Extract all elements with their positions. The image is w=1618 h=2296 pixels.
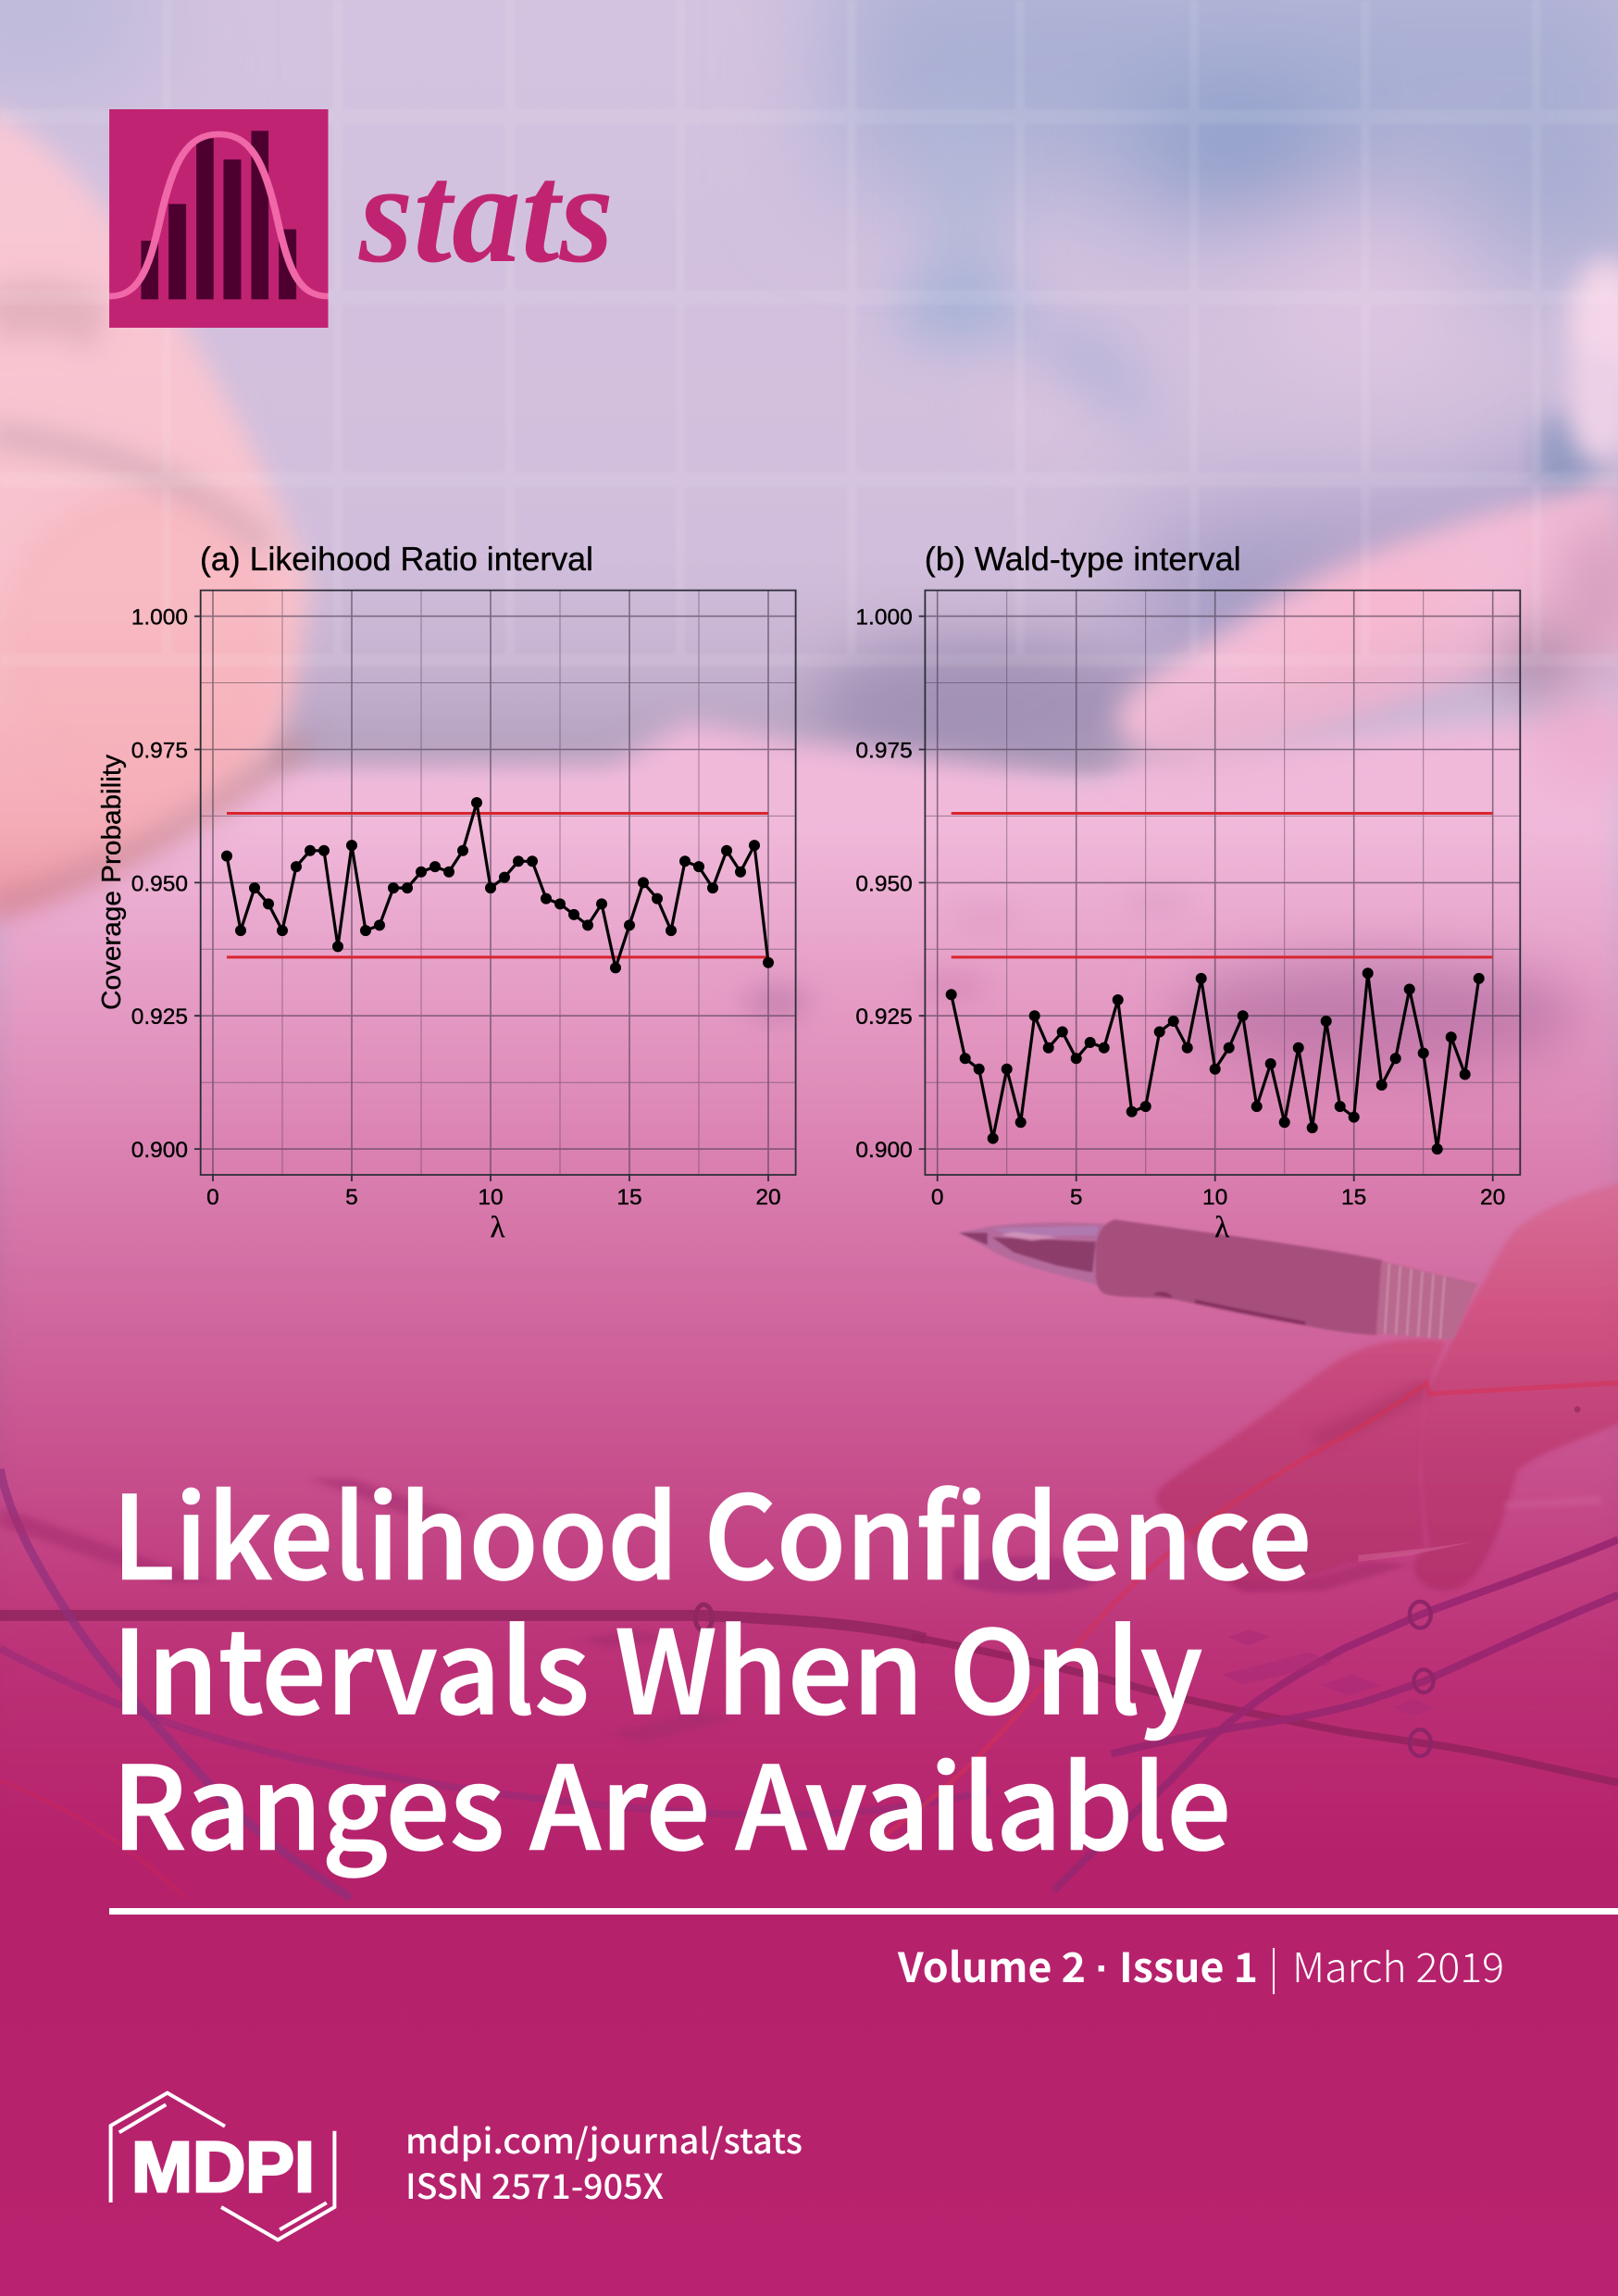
journal url and ISSN [405,2114,803,2209]
journal url and ISSN: mdpi.com/journal/stats [405,2114,803,2164]
right finger [1116,481,1618,757]
under-hand shadows [1226,1562,1412,1592]
journal logo [109,109,329,328]
chart a x axis title: λ [490,1211,505,1244]
issue line [897,1935,1504,1994]
chart a y axis title: Coverage Probability [97,754,127,1010]
hand, pen and lines, lower right [881,1179,1618,1890]
chart a y tick labels: 0.975 [131,739,188,763]
chart b x tick labels: 15 [1341,1185,1366,1210]
chart b x tick labels: 20 [1480,1185,1505,1210]
issue line: Issue 1 [1119,1935,1258,1994]
finger [1156,1340,1447,1586]
mauve table shadow [268,555,1194,778]
chart b title: (b) Wald-type interval [925,540,1241,578]
nib and barrel [959,1222,1107,1286]
chart b x tick labels: 10 [1202,1185,1227,1210]
MDPI logo [111,2093,334,2240]
chart b coverage line [952,973,1479,1149]
chart b y tick labels: 0.925 [855,1004,913,1029]
thumb and palm [1413,1179,1618,1591]
chart a x tick labels: 0 [206,1185,219,1210]
issue line: March 2019 [1292,1935,1504,1994]
histogram bars [141,131,296,299]
chart a x tick labels: 15 [616,1185,642,1210]
chart a y tick labels: 1.000 [131,605,188,630]
issue line: Volume 2 [897,1935,1086,1994]
chart b y tick labels: 0.950 [855,871,913,896]
chart b y tick labels: 0.975 [855,739,913,763]
red rule [881,1383,1618,1838]
chart a y tick labels: 0.925 [131,1004,188,1029]
chart a x tick labels: 5 [345,1185,358,1210]
chart b x tick labels [931,1185,1505,1210]
bell curve [109,134,329,296]
chart a data points [227,803,768,967]
chart a x tick labels [206,1185,781,1210]
chart b x axis title: λ [1214,1211,1229,1244]
chart a frame and ticks [194,591,796,1181]
chart a y tick labels [131,605,188,1163]
article title [112,1446,1312,1883]
chart b x tick labels: 0 [931,1185,944,1210]
dark slate patch right edge [1537,412,1601,505]
right edge finger [1569,259,1618,389]
diamonds on paper [1222,1629,1434,1716]
sheet highlight [1358,1541,1474,1562]
MDPI logo: MDPI [131,2128,315,2207]
chart a confidence bounds [227,813,768,957]
issue line: · [1096,1946,1109,1991]
chart b confidence bounds [952,813,1493,957]
chart b y tick labels [855,605,913,1163]
pen [959,1219,1477,1340]
title rule [109,1908,1618,1915]
window grid lines [0,0,1618,667]
chart b y tick labels: 0.900 [855,1138,913,1163]
article title: Ranges Are Available [112,1716,1231,1883]
chart b x tick labels: 5 [1070,1185,1083,1210]
grip [1096,1219,1383,1335]
paper [0,713,1618,2296]
knuckle shading [1314,1388,1426,1441]
chart b frame and ticks [919,591,1520,1181]
chart curves [913,1540,1618,1890]
chart a x tick labels: 20 [755,1185,781,1210]
chart a: Likelihood Ratio interval [97,540,796,1244]
chart a grid [201,591,796,1175]
article title: Intervals When Only [112,1580,1202,1747]
chart b data points [952,973,1479,1149]
left pink hand [0,102,310,926]
blue shadows upper right [0,0,1618,741]
chart b: Wald-type interval [855,540,1520,1244]
lower left chart curves [0,1469,990,1898]
article title: Likelihood Confidence [112,1446,1312,1613]
chart b grid [925,591,1520,1175]
metal collar [1376,1261,1477,1340]
journal url and ISSN: ISSN 2571-905X [405,2159,664,2209]
chart a y tick labels: 0.950 [131,871,188,896]
chart a coverage line [227,803,768,967]
chart a x tick labels: 10 [478,1185,504,1210]
chart b y tick labels: 1.000 [855,605,913,630]
curve markers [1410,1602,1434,1756]
journal name: stats [358,135,614,293]
chart a y tick labels: 0.900 [131,1138,188,1163]
chart a title: (a) Likeihood Ratio interval [200,540,593,578]
